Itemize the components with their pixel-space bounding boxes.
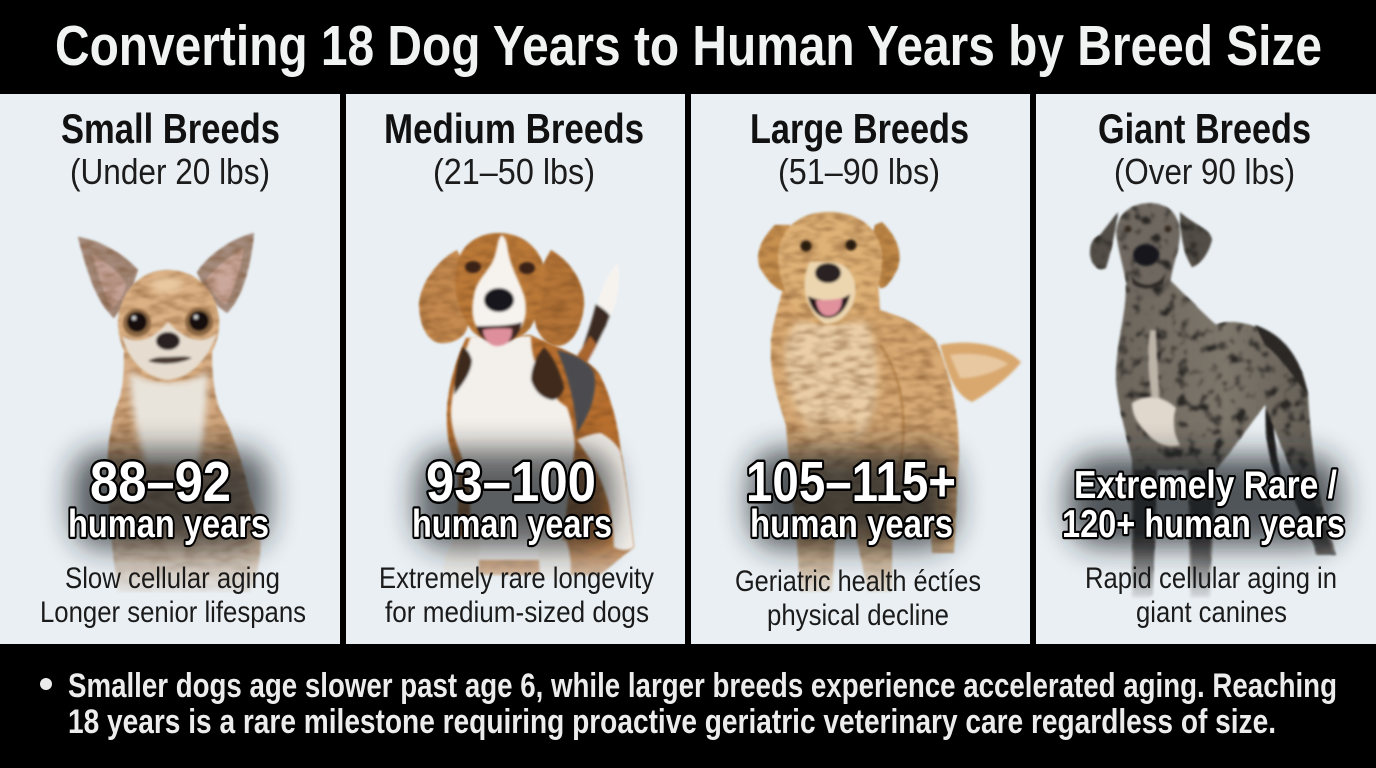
value: 93–100 human years: human years	[412, 503, 612, 546]
weight range: small: (Under 20 lbs)	[70, 151, 270, 192]
heading: medium breeds: Medium Breeds	[384, 105, 644, 152]
value: 88–92 human years: human years	[68, 503, 269, 546]
note: medium breeds: for medium-sized dogs	[385, 596, 649, 629]
note: small breeds: Longer senior lifespans	[40, 596, 306, 629]
note: medium breeds	[379, 562, 654, 629]
dark halo behind value	[1068, 456, 1340, 546]
icon: great dane	[1090, 203, 1336, 598]
heading: small breeds: Small Breeds	[61, 105, 280, 152]
icon: golden retriever	[758, 212, 1021, 592]
value: 105–115+ human years: human years	[750, 503, 953, 546]
weight range: large: (51–90 lbs)	[778, 151, 940, 192]
icon: beagle	[419, 233, 634, 584]
panel: giant breeds	[1036, 94, 1376, 644]
heading: large breeds: Large Breeds	[750, 105, 969, 152]
value: 88–92 human years	[68, 450, 269, 546]
note: giant breeds	[1085, 562, 1337, 629]
panel: medium breeds	[346, 94, 685, 644]
value: extremely rare 120+ human years	[1062, 464, 1345, 546]
icon: bullet	[40, 678, 52, 690]
note: small breeds: Slow cellular aging	[65, 562, 280, 595]
note: small breeds	[40, 562, 306, 629]
dark halo behind value	[750, 450, 955, 548]
footer takeaway	[40, 667, 1337, 741]
value: 93–100 human years: 93–100	[426, 450, 596, 514]
value: 88–92 human years: 88–92	[90, 450, 231, 514]
panel: small breeds	[0, 94, 340, 644]
note: large breeds: physical decline	[767, 599, 949, 632]
note: medium breeds: Extremely rare longevity	[379, 562, 654, 595]
note: large breeds	[735, 565, 981, 632]
heading: giant breeds: Giant Breeds	[1098, 105, 1311, 152]
panel: large breeds	[691, 94, 1030, 644]
note: giant breeds: giant canines	[1136, 596, 1287, 629]
value: 93–100 human years	[412, 450, 612, 546]
weight range: medium: (21–50 lbs)	[433, 151, 595, 192]
value: 105–115+ human years: 105–115+	[746, 450, 956, 514]
footer text	[68, 667, 1337, 741]
value: extremely rare 120+ human years: Extremely Rare /	[1074, 464, 1337, 507]
note: large breeds: Geriatric health éctíes	[735, 565, 981, 598]
dark halo behind value	[416, 450, 612, 548]
note: giant breeds: Rapid cellular aging in	[1085, 562, 1337, 595]
icon: chihuahua	[78, 233, 260, 592]
value: 105–115+ human years	[746, 450, 956, 546]
dark halo behind value	[72, 450, 268, 548]
weight range: giant: (Over 90 lbs)	[1114, 151, 1295, 192]
